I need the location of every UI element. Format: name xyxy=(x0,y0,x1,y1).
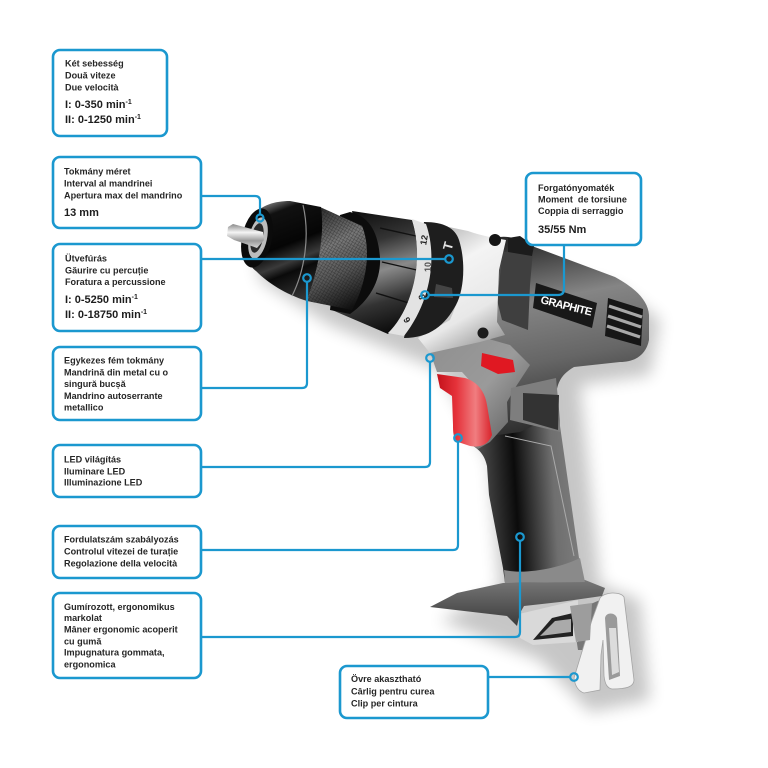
value: impact rates: I: 0-5250 min xyxy=(65,294,132,306)
drill bit xyxy=(227,224,264,248)
screw top xyxy=(489,234,501,246)
trigger xyxy=(437,374,492,447)
speed ring dark xyxy=(404,222,463,338)
panel: speed control xyxy=(53,526,201,578)
text: LED labels xyxy=(64,454,143,488)
chuck nose xyxy=(236,206,278,270)
text: speed control labels: Controlul vitezei de turație xyxy=(64,546,178,556)
text: hammer drilling labels: Foratura a percussione xyxy=(65,277,166,287)
panel: keyless chuck xyxy=(53,347,201,420)
handle xyxy=(466,385,585,583)
drill illustration xyxy=(227,201,660,712)
rear collar xyxy=(330,212,380,314)
panel: belt clip xyxy=(340,666,488,718)
scale number 10: 10 xyxy=(423,262,433,272)
text: rubber grip labels: Gumírozott, ergonomikus xyxy=(64,602,175,612)
callout line: LED xyxy=(201,354,434,467)
text: rubber grip labels: ergonomica xyxy=(64,660,116,670)
logo plate xyxy=(533,283,597,328)
text: chuck size labels xyxy=(64,166,183,200)
text: two speeds labels: Două viteze xyxy=(65,70,116,80)
panel: torque xyxy=(526,173,641,245)
panel: LED light xyxy=(53,445,201,497)
value: speeds: -1 xyxy=(126,99,132,106)
value: speeds: II: 0-1250 min xyxy=(65,114,135,126)
text: torque labels xyxy=(538,183,627,216)
text: belt clip labels: Cârlig pentru curea xyxy=(351,686,435,696)
text: two speeds labels: Két sebesség xyxy=(65,58,124,68)
callout line: speed control xyxy=(201,434,462,550)
text: chuck size labels: Interval al mandrinei xyxy=(64,178,152,188)
hammer symbol: T xyxy=(440,240,456,252)
text: speed control labels: Regolazione della velocità xyxy=(64,558,178,568)
text: speed control labels xyxy=(64,534,179,568)
silver scale ring xyxy=(388,219,433,336)
drop shadow xyxy=(255,240,660,712)
callout line: keyless chuck xyxy=(201,274,311,388)
value: impact rates xyxy=(65,294,147,321)
text: belt clip labels xyxy=(351,674,435,708)
text: keyless chuck labels: metallico xyxy=(64,402,104,412)
text: rubber grip labels: Mâner ergonomic acoperit xyxy=(64,624,178,634)
value: impact rates: -1 xyxy=(132,294,138,301)
text: two speeds labels: Due velocità xyxy=(65,82,120,92)
silver collar xyxy=(418,226,506,353)
text: chuck size labels: Tokmány méret xyxy=(64,166,131,176)
brand logo: GRAPHITE xyxy=(539,294,593,319)
text: belt clip labels: Övre akasztható xyxy=(351,674,422,684)
text: keyless chuck labels xyxy=(64,356,169,412)
vents xyxy=(605,298,643,346)
text: LED labels: LED világítás xyxy=(64,454,121,464)
callout line: hammer drilling xyxy=(201,255,453,263)
value: 13 mm: 13 mm xyxy=(64,207,99,219)
callout line: chuck size xyxy=(201,196,264,222)
scale number 12: 12 xyxy=(418,234,430,246)
text: LED labels: Iluminare LED xyxy=(64,466,126,476)
trigger housing xyxy=(430,336,560,449)
callout line: grip xyxy=(201,533,524,637)
red switch button xyxy=(481,353,515,374)
knurled sleeve xyxy=(307,207,367,310)
top bump xyxy=(508,236,534,256)
text: keyless chuck labels: Egykezes fém tokmány xyxy=(64,356,165,366)
text: hammer drilling labels xyxy=(65,254,166,287)
panel: chuck size xyxy=(53,157,201,228)
text: belt clip labels: Clip per cintura xyxy=(351,698,419,708)
base plate xyxy=(430,580,605,626)
text: rubber grip labels: Impugnatura gommata, xyxy=(64,648,165,658)
value: speeds: I: 0-350 min xyxy=(65,99,126,111)
value: speeds xyxy=(65,99,141,126)
gearbox xyxy=(332,211,421,334)
scale number 6: 6 xyxy=(401,315,413,325)
text: torque labels: Coppia di serraggio xyxy=(538,206,624,216)
value: impact rates: II: 0-18750 min xyxy=(65,309,141,321)
text: LED labels: Illuminazione LED xyxy=(64,478,143,488)
value: impact rates: -1 xyxy=(141,309,147,316)
screw bottom xyxy=(478,328,488,338)
text: rubber grip labels xyxy=(64,602,178,670)
panel: hammer drilling xyxy=(53,244,201,331)
text: torque labels: Forgatónyomaték xyxy=(538,183,615,193)
callout line: torque xyxy=(421,245,564,299)
text: hammer drilling labels: Găurire cu percuție xyxy=(65,266,148,276)
panel: rubber grip xyxy=(53,593,201,678)
panel: two speeds xyxy=(53,50,167,136)
text: keyless chuck labels: singură bucșă xyxy=(64,379,127,389)
lower foot xyxy=(519,600,592,645)
chuck cone xyxy=(245,201,322,301)
text: two speeds labels xyxy=(65,58,124,92)
value: torque: 35/55 Nm xyxy=(538,224,587,236)
belt clip xyxy=(572,593,634,693)
text: chuck size labels: Apertura max del mandrino xyxy=(64,190,183,200)
motor housing xyxy=(490,237,649,436)
text: keyless chuck labels: Mandrino autoserrante xyxy=(64,391,163,401)
mode switch tab xyxy=(434,284,453,298)
scale number 8: 8 xyxy=(417,293,427,301)
text: keyless chuck labels: Mandrină din metal cu o xyxy=(64,368,169,378)
chuck highlight xyxy=(292,205,306,296)
text: torque labels: Moment de torsiune xyxy=(538,194,627,204)
side panel xyxy=(497,250,533,330)
text: hammer drilling labels: Ütvefúrás xyxy=(65,254,107,264)
text: rubber grip labels: cu gumă xyxy=(64,636,102,646)
text: speed control labels: Fordulatszám szabályozás xyxy=(64,534,179,544)
callout line: belt clip xyxy=(488,673,578,681)
value: speeds: -1 xyxy=(135,114,141,121)
text: rubber grip labels: markolat xyxy=(64,613,102,623)
